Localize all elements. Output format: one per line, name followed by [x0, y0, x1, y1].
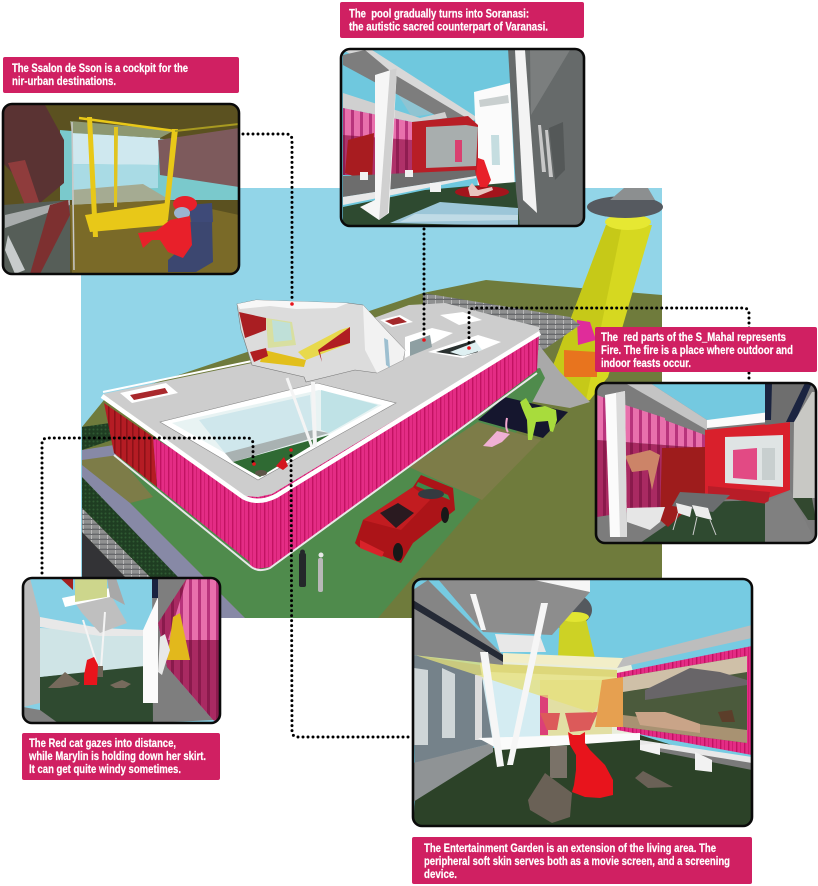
curtain body [597, 440, 705, 517]
road band [82, 465, 245, 618]
red Ferrari [355, 475, 455, 563]
struts [287, 378, 315, 447]
panel: Salon de Sson cockpit view [3, 103, 239, 274]
pink right facade [240, 333, 539, 569]
roof underside [437, 578, 590, 635]
main scene: aerial view of the S_Mahal house [81, 188, 663, 618]
stone retaining wall [82, 508, 150, 577]
callout: entertainment garden [412, 837, 752, 884]
Marylin statue [158, 634, 170, 675]
callout: cockpit: nir-urban destinations. [12, 76, 116, 88]
dark red partition [345, 133, 374, 176]
pavilion back wall [480, 660, 640, 745]
left soffit [413, 580, 503, 665]
back skylights [380, 312, 501, 358]
grass floor [640, 500, 768, 543]
movie screen curtain [617, 646, 752, 755]
cockpit struts [83, 612, 105, 668]
dining chairs [360, 170, 413, 180]
panel: Entertainment Garden view [412, 578, 752, 826]
panel 4 frame [23, 578, 220, 723]
ledge [708, 486, 770, 504]
building [102, 300, 540, 570]
white roof edge [102, 333, 540, 501]
back rock [635, 771, 673, 788]
terrace edge [343, 170, 476, 197]
white pillar [605, 391, 627, 537]
callout: cockpit: The Ssalon de Sson is a cockpit for the [12, 63, 188, 75]
dotted leader: fire room [469, 308, 749, 378]
left wall [23, 578, 40, 707]
small block [430, 183, 441, 192]
grey corner [23, 707, 58, 723]
black mat [478, 397, 568, 438]
callout: fire: indoor feasts occur. [601, 358, 691, 370]
callout: fire [595, 327, 817, 372]
green lawn [110, 368, 545, 618]
projected yellow shape [167, 613, 190, 660]
panel: red cat and Marylin view [22, 577, 220, 723]
cockpit volume [237, 300, 405, 382]
red cat [84, 657, 98, 685]
pink flamingo sculpture [483, 418, 510, 447]
cockpit underside [73, 590, 127, 633]
grey paving around the beam [505, 345, 590, 408]
white struts [470, 594, 548, 767]
terrace seen through window [72, 184, 170, 205]
right roof band [617, 625, 752, 668]
sky [342, 50, 516, 220]
pool [390, 202, 518, 226]
pale ceiling band [70, 121, 175, 138]
callout: red cat [22, 733, 220, 780]
red circular rug [455, 186, 509, 198]
panel: red Fire room view [595, 382, 817, 544]
yellow frames [72, 117, 239, 270]
callout: cockpit [3, 57, 239, 93]
right wall [765, 383, 805, 425]
white soffit strip [625, 383, 707, 430]
pink front-left facade [153, 437, 256, 567]
reclining figure [468, 183, 493, 196]
glass skylight [398, 95, 433, 116]
red target dots [252, 302, 471, 466]
rocks [48, 666, 131, 688]
dotted leader: cockpit [243, 134, 292, 302]
red wall [412, 116, 478, 175]
screened film still [623, 656, 747, 743]
left steps [413, 743, 493, 802]
red chairs [540, 712, 598, 732]
courtyard [160, 383, 396, 480]
UFO light beam [545, 188, 663, 406]
astronaut [138, 196, 197, 258]
table [672, 492, 730, 512]
brown patch right [409, 422, 541, 500]
sky [22, 577, 220, 723]
cockpit ceiling [3, 103, 239, 274]
panel 1 frame [3, 104, 239, 274]
left dark wall [3, 105, 64, 203]
lawn [413, 735, 752, 826]
second beam [343, 93, 447, 122]
chairs [673, 503, 716, 535]
dotted leader: red cat [42, 438, 253, 573]
dotted leader: entertainment garden [291, 452, 408, 737]
red wall [705, 422, 790, 500]
bench [627, 507, 665, 530]
red flame sculpture [476, 158, 491, 187]
callout: pool [340, 2, 584, 38]
dark red partition [660, 447, 705, 527]
seat [168, 203, 213, 272]
deck [478, 733, 640, 750]
base slab edge [114, 373, 537, 570]
dark red end facade [104, 403, 157, 487]
left interior [413, 655, 493, 763]
callout: entertainment garden: The Entertainment Garden is an extension of the living area. The [424, 843, 716, 855]
dotted leader: pool [422, 229, 426, 338]
curtain top [597, 395, 705, 448]
olive terrain [82, 280, 662, 618]
glass interior [480, 680, 545, 745]
right floor [765, 490, 816, 543]
grass [40, 665, 170, 723]
hedge [82, 477, 215, 618]
dark right wall [508, 48, 584, 226]
skylight front [120, 383, 178, 403]
white upper beam [343, 50, 478, 122]
callout: pool: the autistic sacred counterpart of Varanasi. [349, 22, 548, 34]
callout: red cat: It can get quite windy sometimes. [29, 764, 181, 776]
white tower [474, 83, 515, 190]
callout: entertainment garden: device. [424, 869, 457, 881]
stone pedestal [550, 746, 567, 778]
cockpit floor [70, 200, 239, 274]
sky background [81, 188, 662, 618]
sky [650, 383, 765, 420]
projected horse [625, 450, 660, 490]
yellow light cone [415, 655, 617, 713]
orange screen edge [595, 677, 623, 727]
panel 5 frame [413, 579, 752, 826]
panel 3 frame [596, 383, 816, 543]
callout: fire: The red parts of the S_Mahal represents [601, 332, 786, 344]
left side railing and view [3, 200, 70, 274]
big red cat [568, 732, 613, 798]
pink curtain [343, 108, 412, 175]
panel 2 frame [341, 49, 584, 226]
glass pavilion [40, 628, 145, 677]
panel: pool and Soranasi view [340, 48, 584, 226]
right wall panel [158, 128, 239, 187]
cockpit view background [60, 130, 239, 200]
skeleton figure [318, 552, 324, 592]
yellow sill [85, 203, 168, 232]
white pillar [360, 68, 397, 220]
grey base [595, 382, 817, 544]
callout: red cat: The Red cat gazes into distance, [29, 738, 176, 750]
grass [343, 182, 520, 226]
callout: entertainment garden: peripheral soft skin serves both as a movie screen, and a screening [424, 856, 730, 868]
curtain [158, 578, 220, 723]
window sky [72, 133, 160, 165]
grey roof [103, 303, 539, 497]
window [426, 125, 478, 168]
white column [143, 597, 158, 703]
grey soffit [343, 50, 478, 122]
callout: pool: The pool gradually turns into Soranasi: [349, 8, 529, 20]
dark figure [299, 550, 306, 587]
stone wall [423, 293, 580, 353]
sky [412, 578, 752, 826]
foreground rock [528, 773, 572, 823]
right side grey wall [152, 578, 213, 723]
brown patch left [82, 452, 153, 503]
green horse sculpture [520, 398, 557, 440]
callout: red cat: while Marylin is holding down her skirt. [28, 751, 206, 763]
road top strip [82, 445, 118, 460]
UFO in view [538, 592, 595, 658]
left floor corner [597, 530, 640, 543]
window [725, 435, 783, 487]
